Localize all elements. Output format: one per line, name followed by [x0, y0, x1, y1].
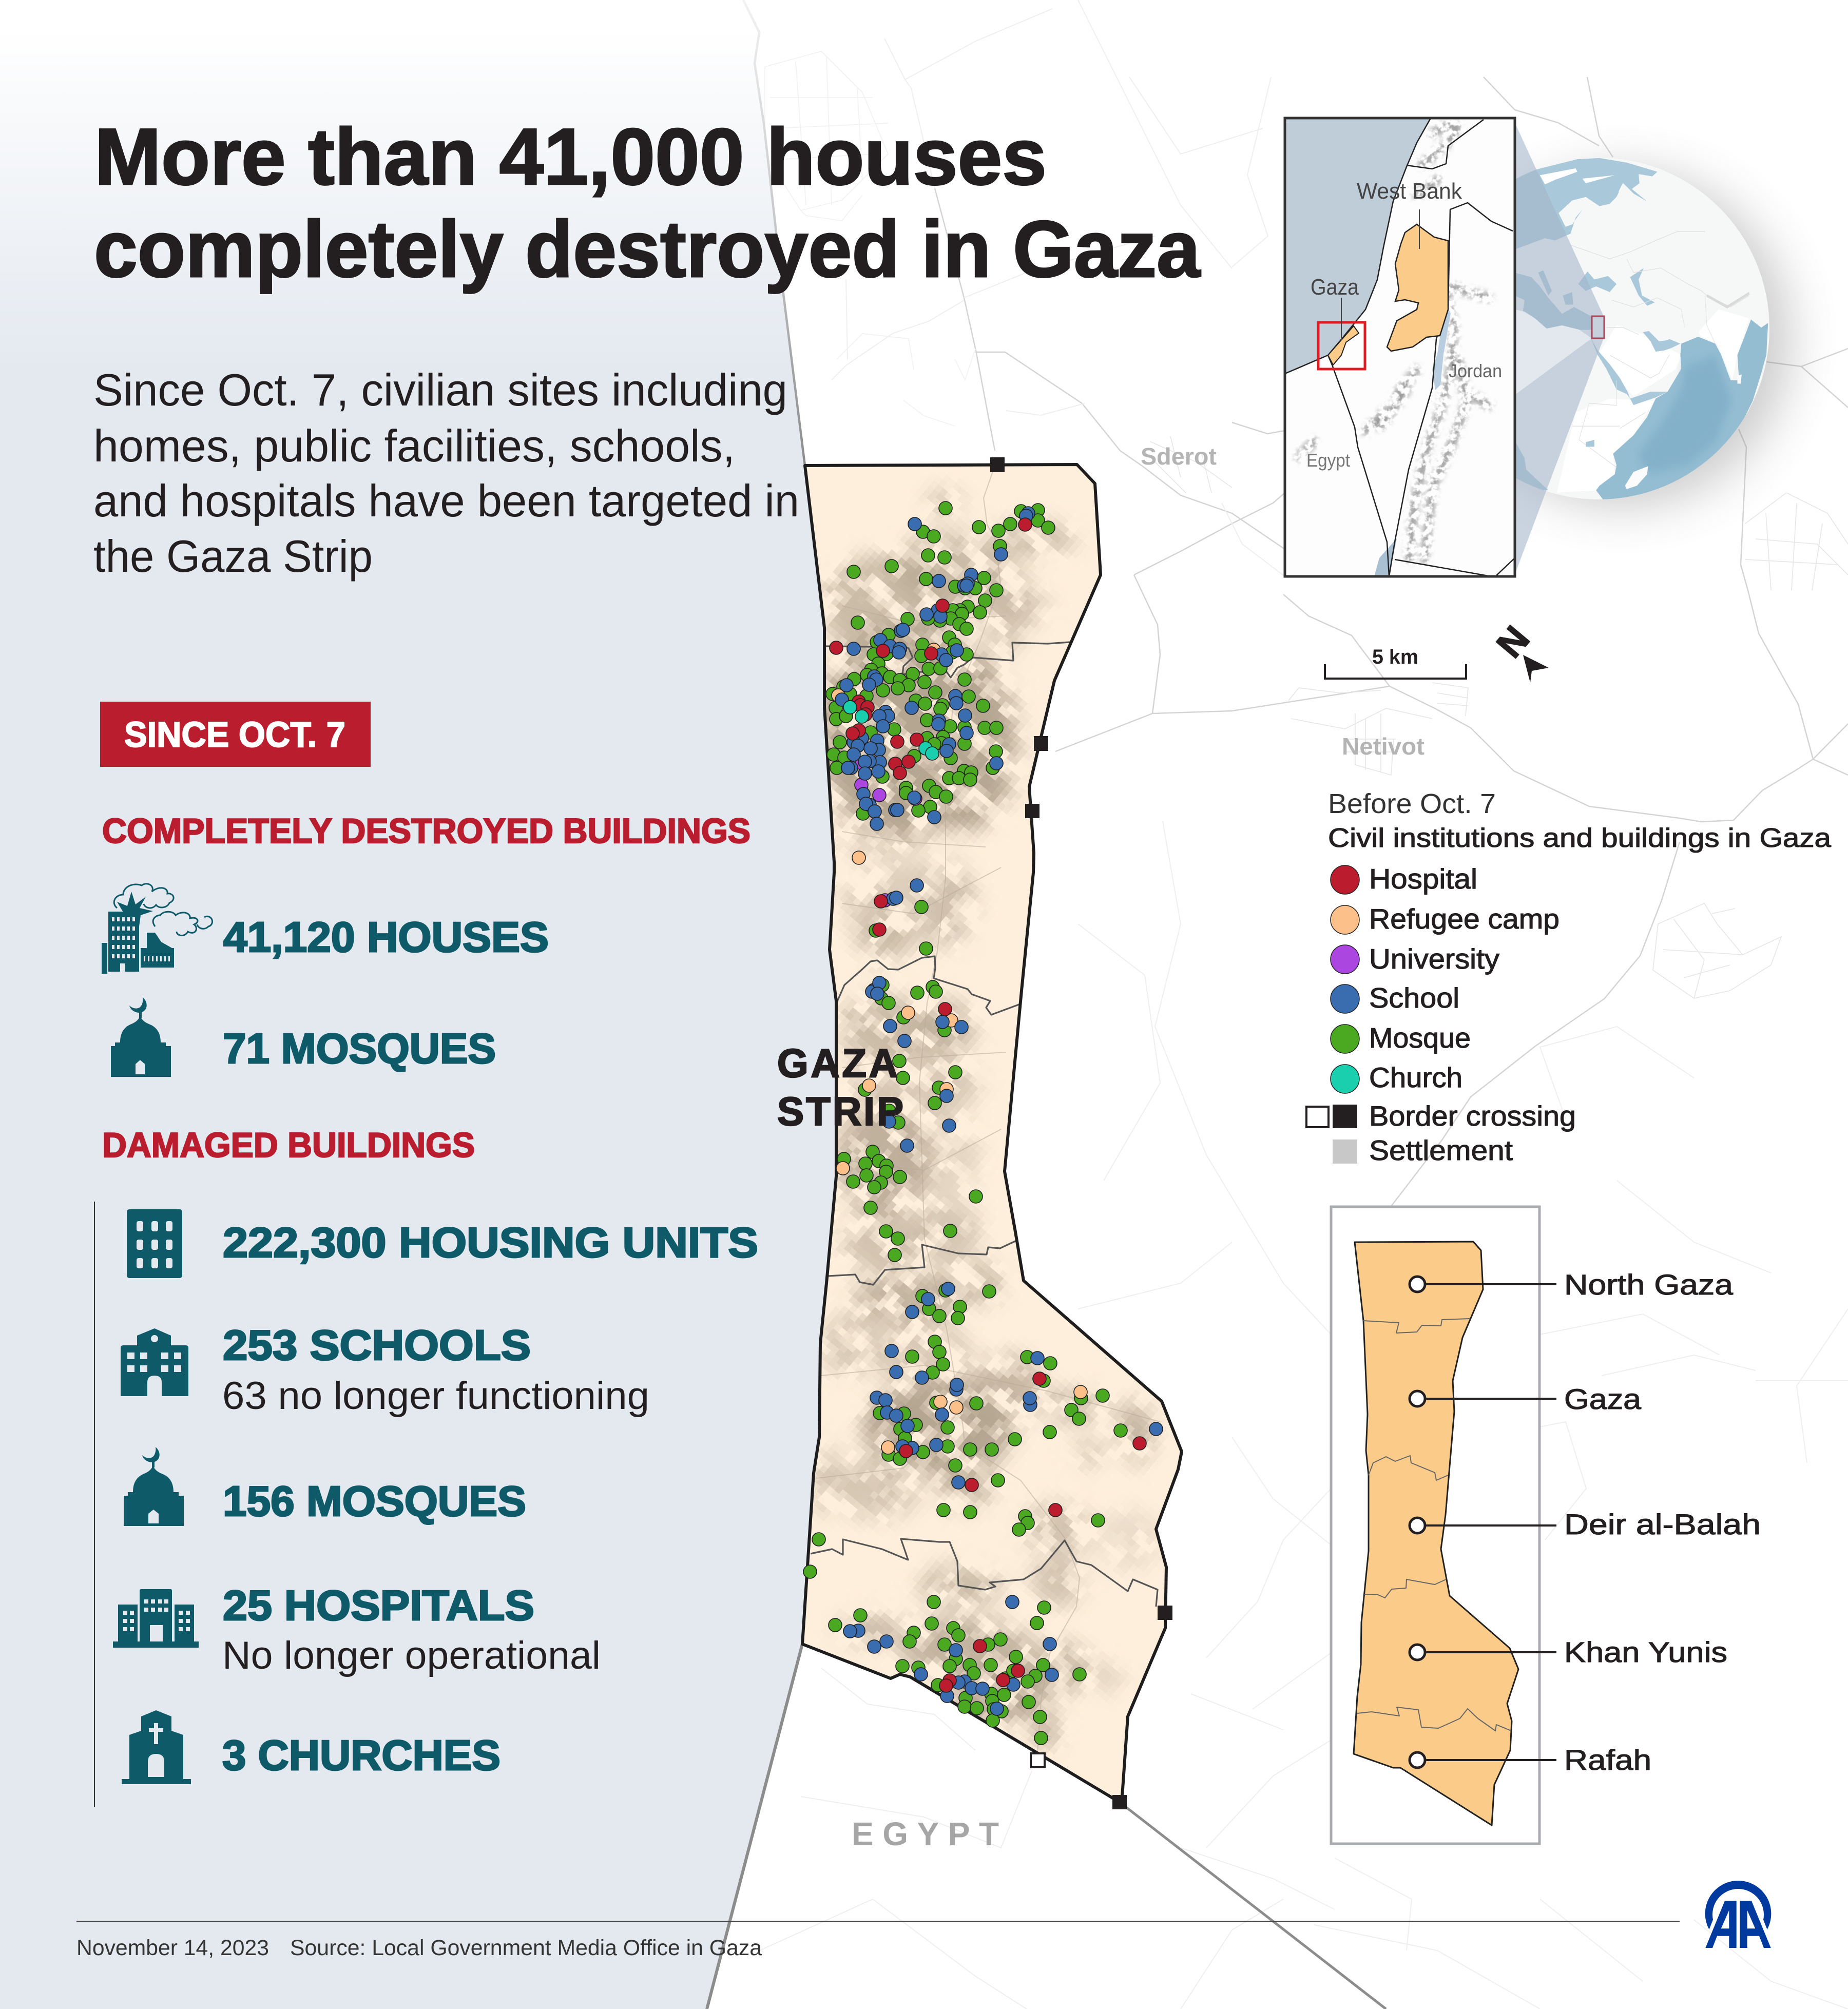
stat: housing units: 222,300 HOUSING UNITS [223, 1219, 758, 1266]
footer text [76, 1936, 762, 1960]
north arrow: N [1489, 619, 1537, 665]
legend: school: School [1369, 982, 1459, 1014]
stat: hospitals: 25 HOSPITALS [223, 1581, 534, 1629]
heading: completely destroyed buildings: COMPLETELY DESTROYED BUILDINGS [102, 812, 750, 851]
legend: settlement: Settlement [1369, 1134, 1513, 1166]
governorate borders [1357, 1319, 1511, 1731]
panel: left sea / info background [0, 0, 836, 2009]
map dots: refugee camps [832, 643, 1087, 1454]
border lines [1570, 231, 1749, 467]
title: More than 41,000 houses [94, 112, 1047, 202]
title [94, 112, 1201, 294]
label: Rafah [1410, 1744, 1651, 1776]
scale bar [1325, 646, 1466, 679]
inset labels: Jordan [1449, 360, 1502, 381]
inset frame [1285, 118, 1515, 576]
north [816, 621, 991, 837]
icon: destroyed building [102, 884, 213, 974]
roads inside the strip [816, 472, 1160, 1760]
legend: university: University [1369, 943, 1500, 975]
scale bar: 5 km [1372, 646, 1418, 668]
strip outline [802, 465, 1182, 1802]
Greenland / Arctic ice [1540, 168, 1623, 192]
label: North Gaza [1410, 1268, 1734, 1301]
middle [842, 862, 975, 944]
icon: hospital [113, 1589, 199, 1648]
label: Deir al-Balah: Deir al-Balah [1564, 1508, 1761, 1540]
stat: 71 mosques: 71 MOSQUES [223, 1025, 496, 1072]
legend: hospital: Hospital [1369, 863, 1477, 895]
locator rectangle [1318, 322, 1365, 369]
Madagascar [1625, 466, 1648, 489]
subtitle: Since Oct. 7, civilian sites including [93, 364, 787, 415]
north arrow [1489, 619, 1549, 683]
footer rule [76, 1921, 1680, 1922]
legend: refugee camp: Refugee camp [1369, 903, 1560, 935]
settlement texture [192, 318, 1779, 1920]
stat: schools: 253 SCHOOLS [223, 1321, 531, 1369]
inset labels: Egypt [1306, 450, 1350, 471]
town street grids [765, 51, 1848, 998]
subtitle [93, 364, 799, 582]
icon: church [122, 1710, 191, 1784]
map dots: universities [855, 757, 922, 907]
label: Egypt: EGYPT [852, 1815, 999, 1852]
footer text: Source: Local Government Media Office in Gaza [290, 1936, 762, 1960]
map dots: schools [835, 507, 1163, 1715]
map dots: mosques [803, 501, 1127, 1745]
footer text: November 14, 2023 [76, 1936, 269, 1960]
icon: mosque [111, 997, 171, 1077]
badge: since Oct. 7 [100, 702, 371, 767]
label: Khan Yunis [1410, 1636, 1727, 1668]
label: Netivot: Netivot [1342, 733, 1424, 760]
legend: church [1331, 1061, 1462, 1093]
legend: church: Church [1369, 1061, 1462, 1093]
inset labels: Gaza [1311, 275, 1359, 300]
background road network [760, 0, 1848, 2009]
governorates shape [1354, 1242, 1518, 1825]
legend title [1328, 788, 1831, 853]
legend: border crossing: Border crossing [1369, 1100, 1576, 1132]
Sri Lanka [1738, 375, 1742, 384]
badge: since Oct. 7: SINCE OCT. 7 [124, 714, 345, 755]
label: Gaza Strip: GAZA [777, 1040, 898, 1086]
icon: school [121, 1328, 188, 1396]
inset labels: West Bank [1357, 179, 1462, 204]
stat: schools [222, 1321, 649, 1418]
label: Deir al-Balah [1410, 1508, 1761, 1540]
globe with wedge [1428, 123, 1792, 574]
vertical rule [94, 1202, 95, 1807]
label: Rafah: Rafah [1564, 1744, 1651, 1776]
stat: hospitals [222, 1581, 601, 1677]
legend [1306, 788, 1831, 1166]
district boundaries [811, 642, 1158, 1607]
map dots: churches [843, 701, 939, 760]
label: Gaza [1410, 1383, 1642, 1415]
West Bank shape [1387, 224, 1448, 351]
stat: schools: 63 no longer functioning [222, 1374, 649, 1418]
border crossings [990, 457, 1172, 1809]
inset leader lines [1341, 209, 1419, 340]
label: Gaza Strip: STRIP [777, 1089, 903, 1134]
label: Gaza Strip [777, 1040, 903, 1134]
map: Gaza Strip territory [801, 463, 1183, 1800]
map dots: hospitals [830, 518, 1146, 1692]
label: Khan Yunis: Khan Yunis [1564, 1636, 1727, 1668]
inset locator map [1285, 118, 1515, 576]
wedge [1515, 123, 1604, 574]
legend: hospital [1331, 863, 1477, 895]
Gaza shape [1328, 326, 1359, 365]
subtitle: the Gaza Strip [93, 531, 373, 582]
stat: damaged mosques: 156 MOSQUES [223, 1477, 526, 1525]
Rafah [919, 1566, 1001, 1607]
Arabia brighter land [1600, 325, 1681, 396]
legend: mosque: Mosque [1369, 1022, 1471, 1054]
stat: 41,120 houses: 41,120 HOUSES [223, 913, 549, 961]
label: North Gaza: North Gaza [1564, 1268, 1734, 1301]
label: Sderot: Sderot [1141, 443, 1217, 470]
legend title: Civil institutions and buildings in Gaza [1328, 823, 1831, 853]
stat: churches: 3 CHURCHES [222, 1731, 500, 1779]
panel: governorates mini map [1331, 1207, 1761, 1844]
logo: AA [1705, 1881, 1771, 1948]
icon: mosque damaged [124, 1447, 184, 1526]
subtitle: and hospitals have been targeted in [93, 475, 799, 526]
inset labels [1306, 179, 1502, 471]
terrain shading [1299, 123, 1489, 559]
heading: damaged buildings: DAMAGED BUILDINGS [102, 1126, 475, 1165]
legend: school [1331, 982, 1459, 1014]
subtitle: homes, public facilities, schools, [93, 420, 735, 471]
title: completely destroyed in Gaza [94, 205, 1201, 294]
coast edge lines [707, 0, 1386, 2009]
label: Gaza: Gaza [1564, 1383, 1642, 1415]
stat: hospitals: No longer operational [222, 1634, 601, 1677]
legend title: Before Oct. 7 [1328, 788, 1496, 819]
icon: apartment building [127, 1209, 182, 1278]
Khan Yunis [852, 1273, 955, 1324]
